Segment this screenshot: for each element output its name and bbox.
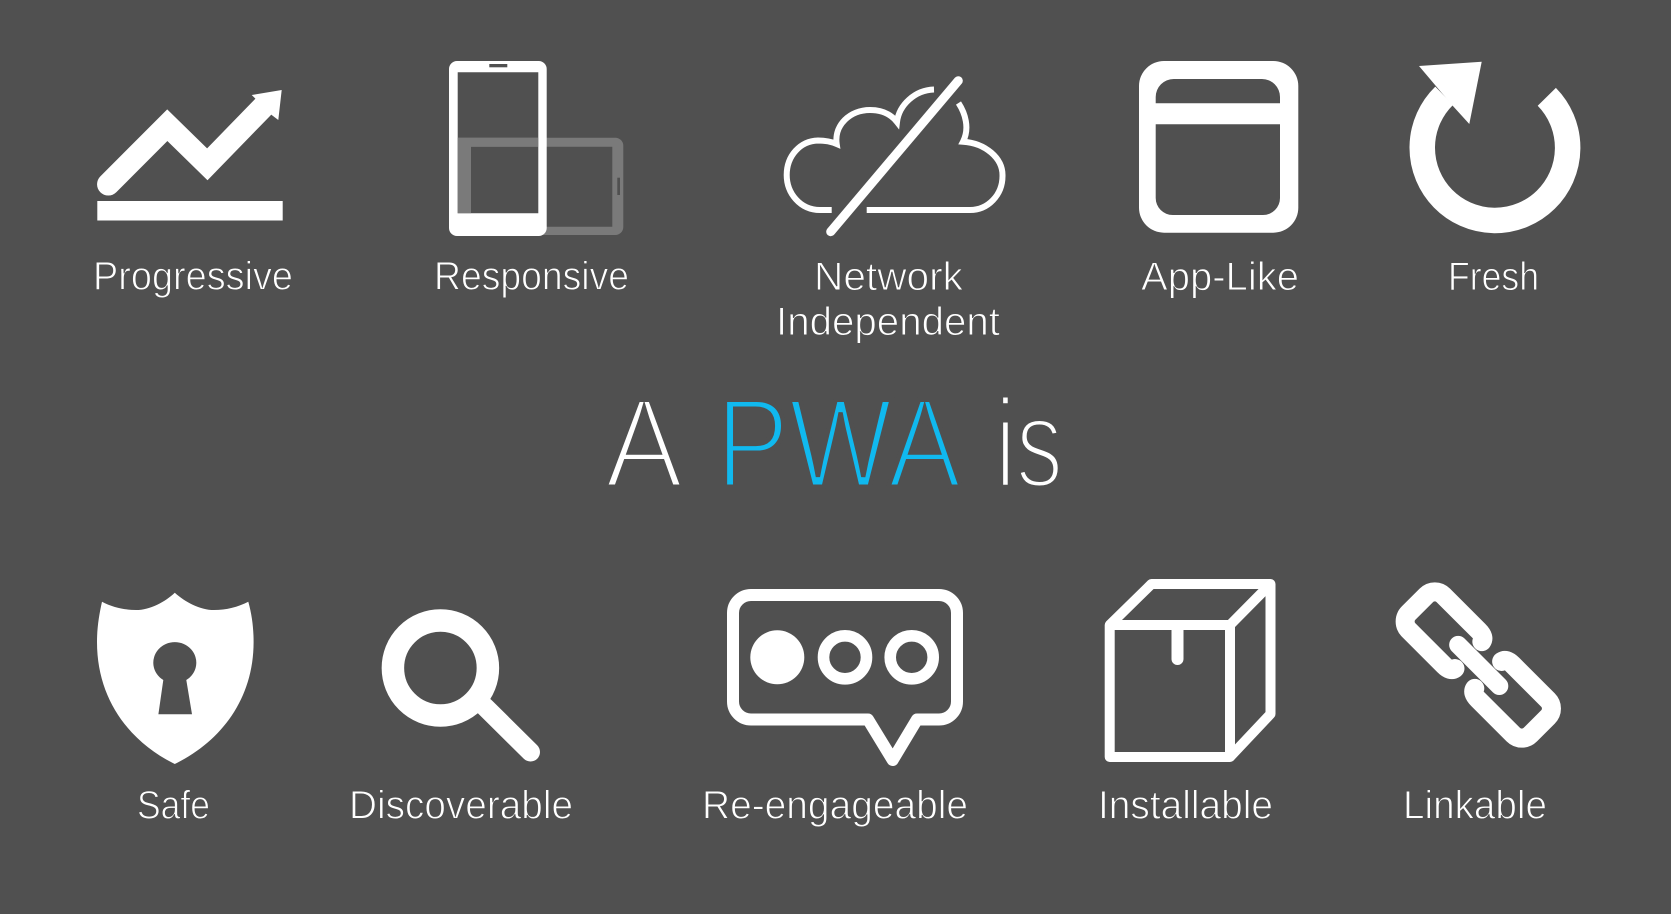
title: PWA [716,372,961,514]
label: Fresh: Fresh [1448,255,1539,299]
label: Re-engageable: Re-engageable [702,784,968,828]
label: App-Like: App-Like [1141,255,1299,299]
item: Network Independent [776,81,1003,344]
icon: app window [1139,61,1298,233]
item: Re-engageable [702,595,968,828]
icon: phone in portrait and landscape [449,61,623,236]
label: Progressive: Progressive [93,254,293,298]
icon: rising chart arrow [97,90,283,220]
item: Safe [97,593,254,828]
icon: box [1110,584,1270,757]
item: Installable [1098,584,1273,828]
icon: crossed-out cloud [787,81,1003,232]
title: is [995,372,1063,514]
title [605,372,1063,514]
icon: magnifying glass [393,620,530,752]
icon: speech bubble with dots [733,595,957,760]
icon: chain link [1400,587,1556,743]
icon: shield with keyhole [97,593,254,764]
label: Independent: Independent [776,300,1000,344]
item: Linkable [1400,587,1556,828]
label: Discoverable: Discoverable [349,784,573,828]
item: Responsive [434,61,629,298]
item: App-Like [1139,61,1299,299]
item: Discoverable [349,620,573,828]
item: Progressive [93,90,293,298]
label: Network: Network [814,255,964,299]
label: Safe: Safe [137,784,210,828]
label: Responsive: Responsive [434,254,629,298]
item: Fresh [1419,62,1568,299]
title: A [605,372,683,514]
icon: refresh arrow [1419,62,1568,220]
label: Linkable: Linkable [1403,784,1547,828]
label: Installable: Installable [1098,784,1273,828]
